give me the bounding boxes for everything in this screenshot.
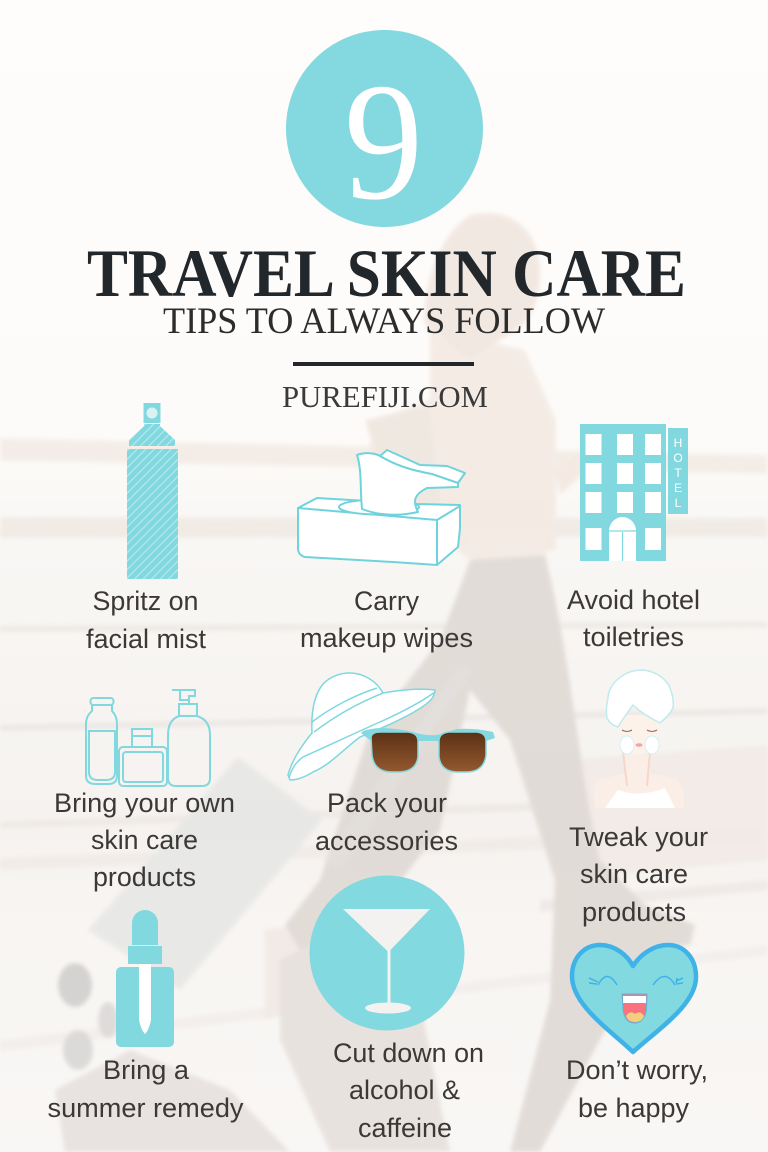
caption: don't worry: be happy xyxy=(578,1093,689,1123)
caption: makeup wipes: makeup wipes xyxy=(300,623,473,653)
number badge: 9 xyxy=(286,30,483,235)
caption: tweak products xyxy=(569,822,708,927)
caption: facial mist: facial mist xyxy=(86,624,206,654)
caption: pack accessories xyxy=(315,788,458,856)
caption: alcohol and caffeine: caffeine xyxy=(358,1113,452,1143)
caption: facial mist xyxy=(86,586,206,654)
caption: don't worry xyxy=(566,1055,708,1123)
subtitle: TIPS TO ALWAYS FOLLOW xyxy=(163,301,605,342)
caption: bring your own products: skin care xyxy=(91,825,198,855)
caption: alcohol and caffeine: Cut down on xyxy=(333,1038,484,1068)
caption: bring your own products: products xyxy=(93,862,196,892)
icon: hotel: L xyxy=(675,496,682,510)
icon: woman with towel washing face xyxy=(594,670,684,808)
icon: hotel xyxy=(580,424,688,561)
caption: summer remedy: Bring a xyxy=(103,1055,190,1085)
caption: hotel toiletries: toiletries xyxy=(583,622,684,652)
divider bar xyxy=(293,362,474,366)
caption: alcohol and caffeine: alcohol & xyxy=(349,1075,460,1105)
icon: tissue box xyxy=(298,450,465,565)
icon: martini glass badge xyxy=(310,876,464,1030)
caption: makeup wipes: Carry xyxy=(354,586,419,616)
caption: hotel toiletries: Avoid hotel xyxy=(567,585,700,615)
icon: hotel: E xyxy=(674,481,682,495)
icon: serum dropper xyxy=(116,910,174,1047)
icon: sun hat and sunglasses xyxy=(288,673,495,780)
caption: summer remedy xyxy=(48,1055,244,1123)
caption: tweak products: products xyxy=(582,897,686,927)
caption: pack accessories: accessories xyxy=(315,826,458,856)
title: TRAVEL SKIN CARE xyxy=(87,235,686,311)
caption: tweak products: skin care xyxy=(580,859,688,889)
caption: facial mist: Spritz on xyxy=(92,586,198,616)
caption: makeup wipes xyxy=(300,586,473,653)
caption: bring your own products xyxy=(54,788,235,892)
website: PUREFIJI.COM xyxy=(282,379,488,414)
icon: hotel: O xyxy=(673,451,683,465)
caption: pack accessories: Pack your xyxy=(327,788,447,818)
caption: summer remedy: summer remedy xyxy=(48,1093,244,1123)
icon: happy heart xyxy=(572,945,696,1052)
icon: skin care bottles xyxy=(86,690,210,786)
caption: hotel toiletries xyxy=(567,585,700,652)
icon: hotel: T xyxy=(674,466,682,480)
caption: alcohol and caffeine xyxy=(333,1038,484,1143)
number badge: 9: 9 xyxy=(344,49,423,235)
icon: spray bottle xyxy=(127,403,178,579)
caption: bring your own products: Bring your own xyxy=(54,788,235,818)
caption: tweak products: Tweak your xyxy=(569,822,708,852)
caption: don't worry: Don’t worry, xyxy=(566,1055,708,1085)
icon: hotel: H xyxy=(674,436,682,450)
